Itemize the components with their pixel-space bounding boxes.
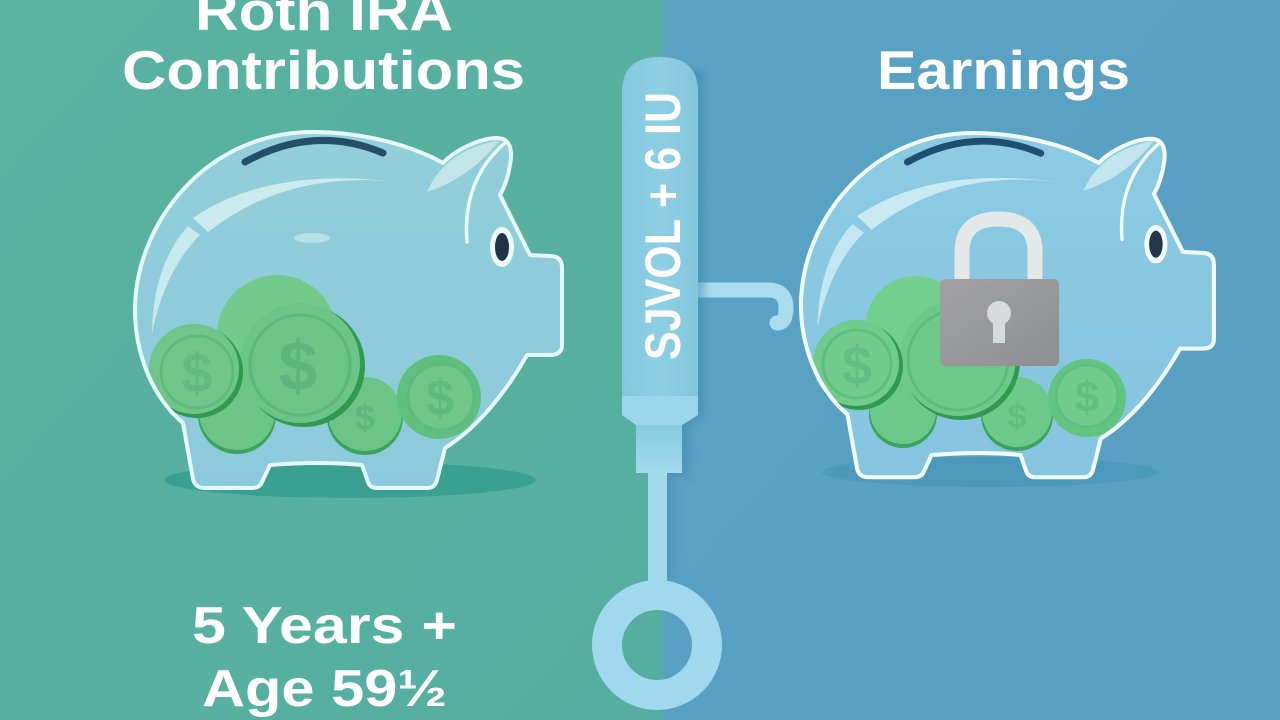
coins xyxy=(149,275,481,455)
text: 5 Years + Age 59½ xyxy=(192,597,457,718)
icon: padlock xyxy=(940,219,1059,366)
coins: $ xyxy=(426,370,454,426)
piggy highlights xyxy=(193,178,403,232)
key lettering: SJVOL + 6 IU xyxy=(635,92,691,360)
arrow: connector from key to locked piggy xyxy=(698,290,786,323)
piggy body xyxy=(801,133,1214,477)
coins xyxy=(813,276,1126,451)
key blade xyxy=(622,57,698,473)
coins: $ xyxy=(181,341,213,404)
heading: Roth IRA Contributions xyxy=(122,0,525,101)
icon: locked piggy bank with coins xyxy=(801,133,1214,487)
key ring xyxy=(607,595,707,695)
piggy shadow xyxy=(822,457,1158,487)
icon: open piggy bank with coins xyxy=(135,132,562,498)
text: 5 Years + Age 59½: Age 59½ xyxy=(202,660,447,718)
heading: Earnings: Earnings xyxy=(877,39,1130,101)
panel: right blue background xyxy=(663,0,1280,720)
coins: $ xyxy=(842,336,872,396)
coins: $ xyxy=(1008,398,1027,436)
heading: Roth IRA Contributions: Contributions xyxy=(122,39,525,101)
panel: left teal background xyxy=(0,0,663,720)
text: 5 Years + Age 59½: 5 Years + xyxy=(192,597,457,655)
key stem xyxy=(648,470,667,586)
coins: $ xyxy=(1075,373,1099,422)
icon: key with garbled lettering xyxy=(607,57,707,695)
ear xyxy=(427,140,500,192)
coin slot xyxy=(245,140,383,162)
key collar xyxy=(636,425,682,473)
piggy shadow xyxy=(164,462,536,498)
coins: $ xyxy=(279,327,317,405)
key band xyxy=(622,396,698,425)
eye xyxy=(490,227,514,267)
piggy outline xyxy=(135,132,562,488)
key shadow xyxy=(662,70,704,580)
piggy body xyxy=(135,132,562,488)
piggy details and outline xyxy=(801,133,1214,477)
coins: $ xyxy=(355,397,375,438)
